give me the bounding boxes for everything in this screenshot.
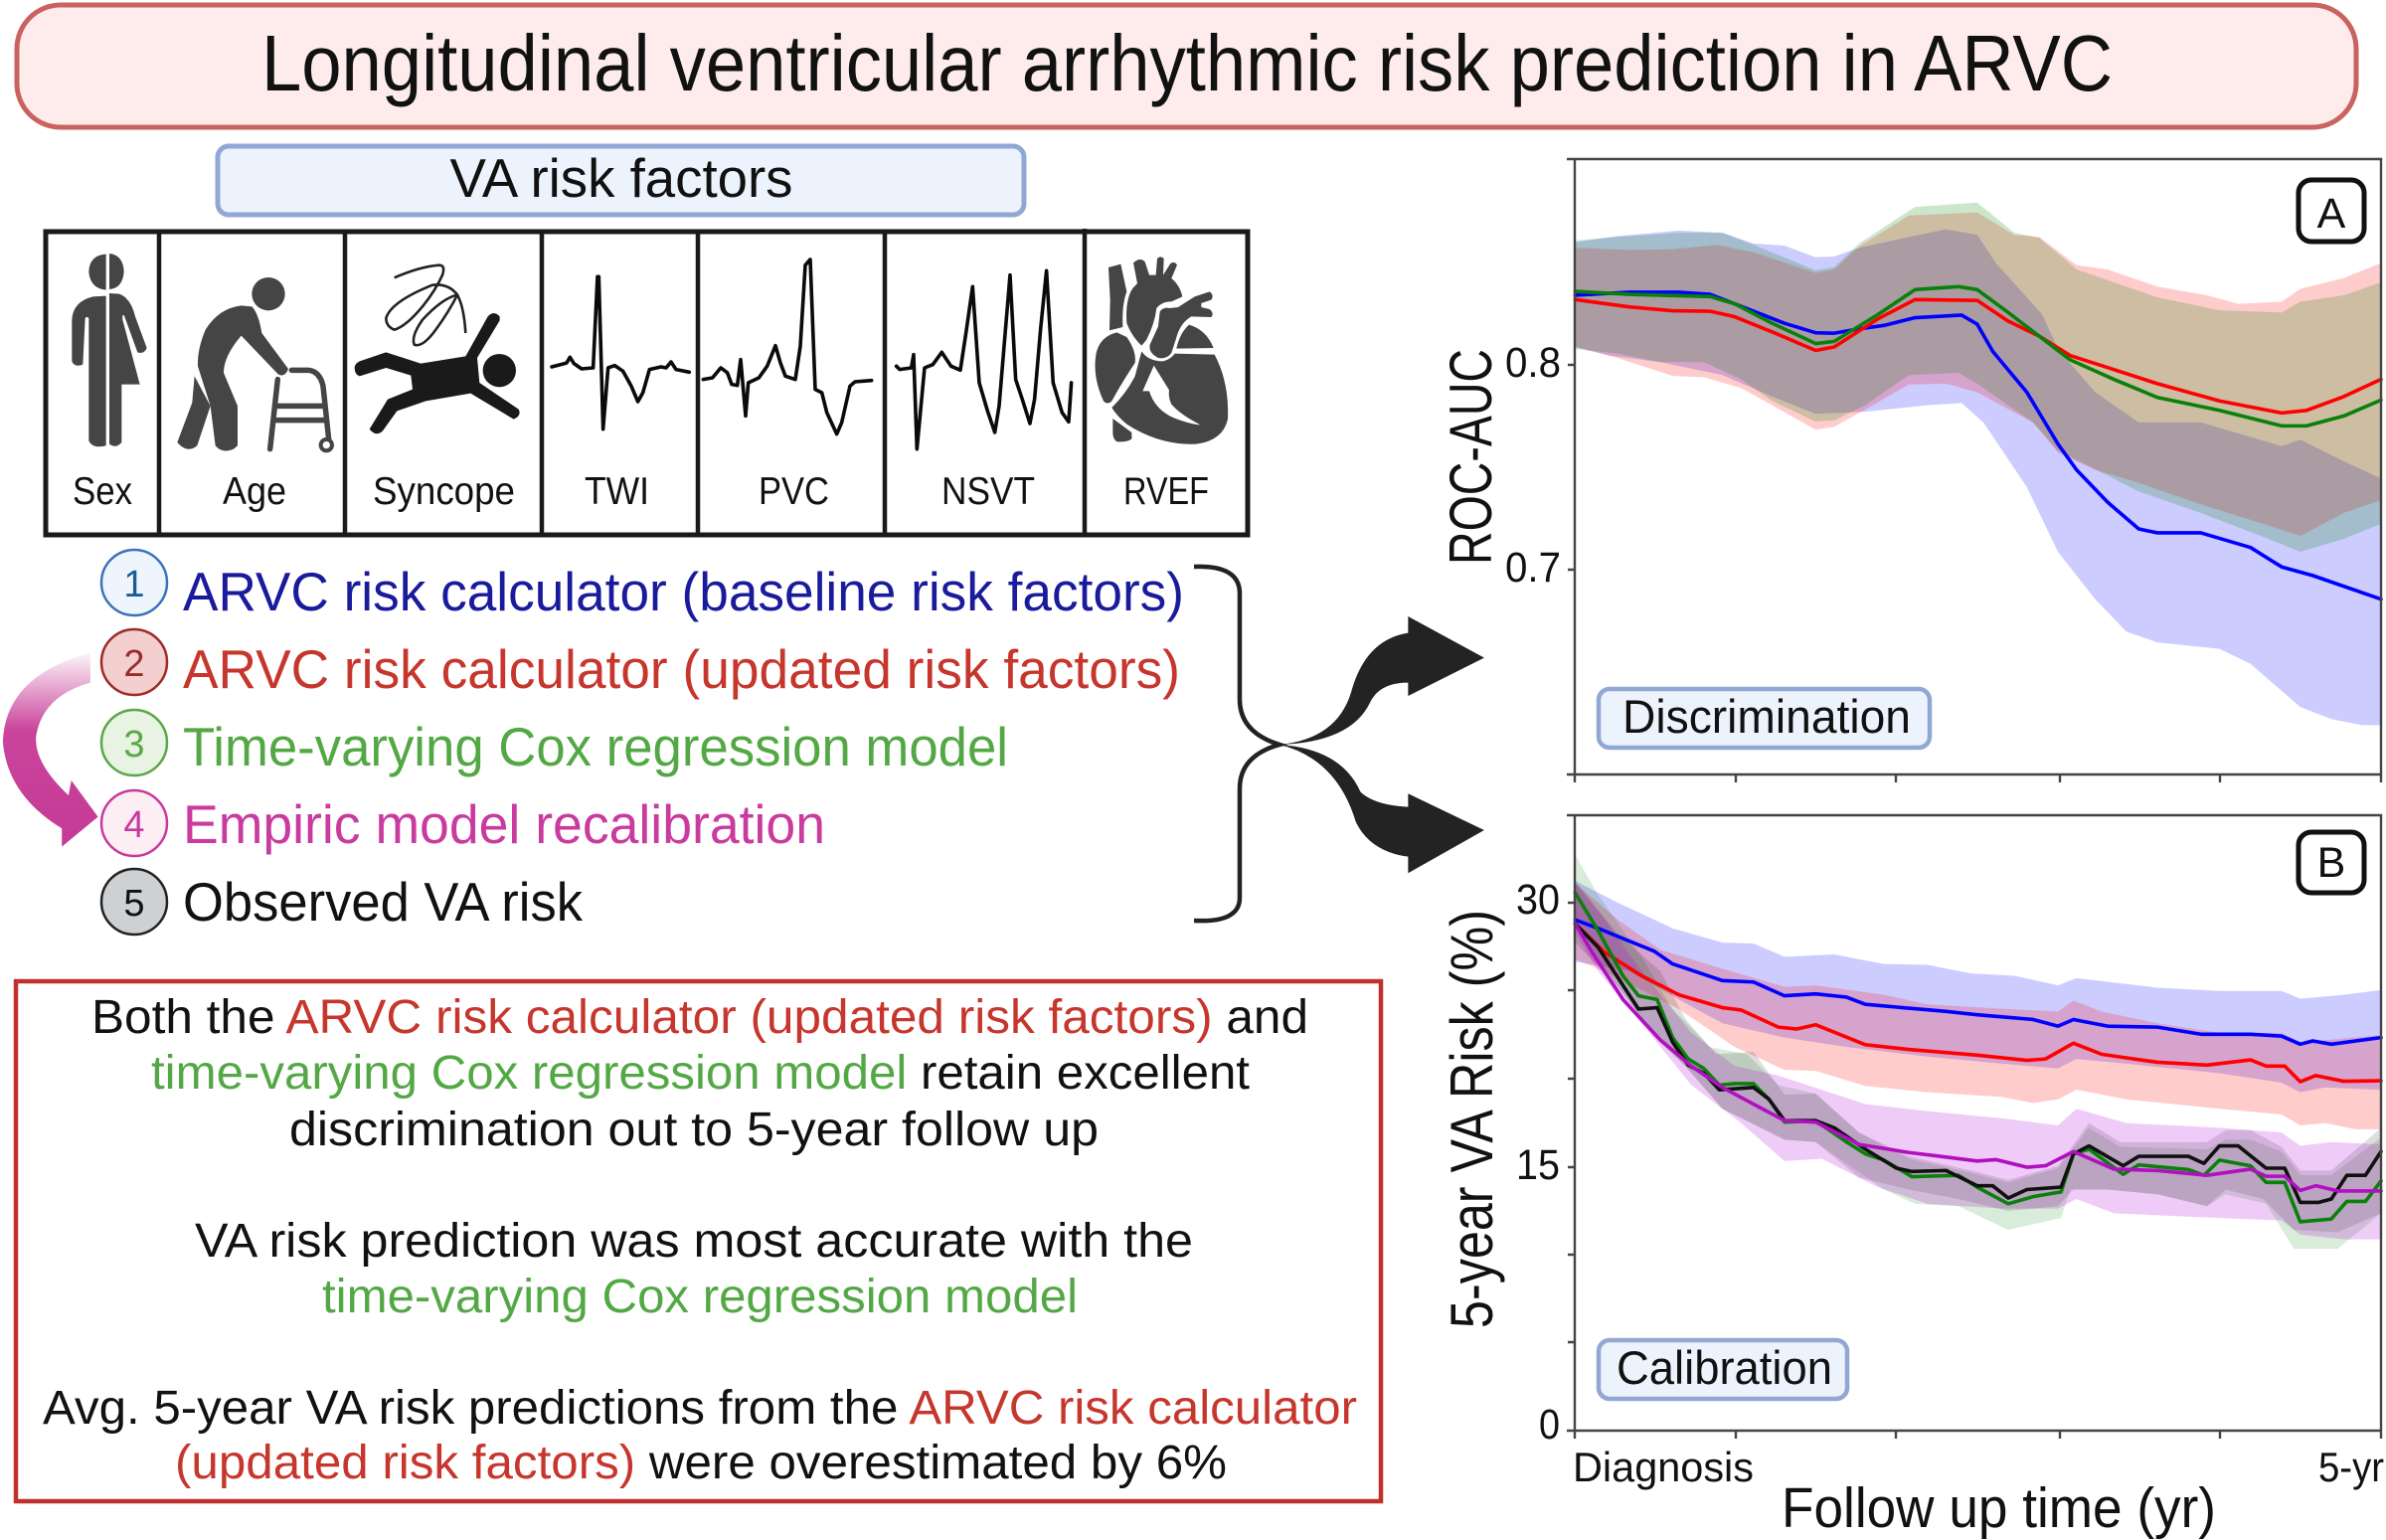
title: Longitudinal ventricular arrhythmic risk prediction in ARVC — [261, 19, 2113, 107]
icon: NSVT ecg — [897, 270, 1072, 449]
bracket — [1194, 567, 1279, 921]
chart B tick labels — [1516, 876, 1560, 1449]
icon: sex — [72, 254, 147, 446]
legend item 5: Observed VA risk — [183, 871, 583, 933]
chart A tick labels — [1505, 339, 1561, 592]
legend item 2: 2 — [123, 643, 145, 685]
legend item 4: 4 — [123, 804, 145, 846]
chart A y label: ROC-AUC — [1438, 349, 1504, 565]
chart B tag: calibration: Calibration — [1617, 1341, 1832, 1394]
factor labels: NSVT — [941, 470, 1035, 513]
factor labels: RVEF — [1123, 470, 1209, 513]
legend: model list — [101, 550, 1184, 935]
heading: VA risk factors: VA risk factors — [449, 147, 793, 209]
legend item 3: 3 — [123, 724, 145, 766]
legend item 2: ARVC risk calculator (updated risk factors) — [183, 638, 1180, 700]
chart B bands — [1575, 855, 2381, 1249]
chart B axes — [1567, 815, 2381, 1439]
findings: accuracy: time-varying Cox regression model — [322, 1271, 1078, 1323]
legend item 5: 5 — [123, 883, 145, 925]
factor labels: Age — [223, 470, 286, 513]
chart A tag: discrimination: Discrimination — [1622, 690, 1911, 743]
icon: syncope falling figure — [355, 265, 520, 433]
legend item 1: 1 — [123, 564, 145, 605]
factor labels: TWI — [585, 470, 649, 513]
chart A tick labels: 0.7 — [1505, 544, 1561, 592]
chart A bands — [1575, 203, 2381, 725]
panel: risk factor table — [46, 229, 1248, 535]
findings: accuracy — [195, 1215, 1193, 1323]
icon: TWI ecg — [552, 276, 689, 429]
icon: age with walker — [177, 277, 332, 451]
findings: discrimination — [91, 991, 1308, 1156]
legend item 3: Time-varying Cox regression model — [183, 716, 1008, 777]
findings: discrimination: discrimination out to 5-year follow up — [289, 1104, 1099, 1156]
arrow: to calibration chart — [1279, 745, 1484, 873]
chart B x label: Follow up time (yr) — [1782, 1476, 2216, 1540]
factor labels: Sex — [73, 470, 132, 513]
legend item 4: Empiric model recalibration — [183, 793, 825, 855]
findings: overestimation: (updated risk factors) were overestimated by 6% — [175, 1437, 1227, 1489]
chart A badge: A — [2317, 190, 2346, 238]
chart B badge — [2299, 832, 2364, 893]
findings: overestimation — [43, 1382, 1357, 1489]
chart A: discrimination — [1438, 159, 2381, 782]
chart B: calibration — [1439, 815, 2384, 1540]
chart B x tick labels — [1573, 1444, 2384, 1490]
chart B y label: 5-year VA Risk (%) — [1439, 910, 1505, 1328]
icon: PVC ecg — [703, 259, 872, 434]
heading: VA risk factors — [218, 146, 1024, 215]
chart B x tick labels: Diagnosis — [1573, 1444, 1754, 1490]
chart B tick labels: 15 — [1516, 1141, 1560, 1189]
chart A axes — [1567, 159, 2381, 782]
arrows to charts — [1279, 616, 1484, 873]
factor labels: Syncope — [373, 470, 515, 513]
chart A lines — [1575, 286, 2381, 599]
legend item 1: ARVC risk calculator (baseline risk factors) — [183, 561, 1184, 622]
findings: accuracy: VA risk prediction was most accurate with the — [195, 1215, 1193, 1268]
findings: overestimation: Avg. 5-year VA risk predictions from the ARVC risk calculator — [43, 1382, 1357, 1435]
panel: key findings — [16, 981, 1381, 1501]
chart B tick labels: 0 — [1539, 1401, 1560, 1449]
arrow: updated to recalibration — [3, 653, 98, 847]
chart B tick labels: 30 — [1516, 876, 1560, 924]
chart B lines — [1575, 893, 2381, 1222]
icon: heart — [1095, 257, 1228, 444]
chart B badge: B — [2317, 839, 2345, 887]
findings: discrimination: time-varying Cox regression model retain excellent — [151, 1047, 1250, 1100]
title — [17, 5, 2356, 127]
chart A tick labels: 0.8 — [1505, 339, 1561, 387]
arrow: to discrimination chart — [1279, 616, 1484, 745]
chart A badge — [2299, 180, 2364, 242]
findings: discrimination: Both the ARVC risk calculator (updated risk factors) and — [91, 991, 1308, 1044]
factor labels — [73, 470, 1209, 513]
factor labels: PVC — [759, 470, 829, 513]
